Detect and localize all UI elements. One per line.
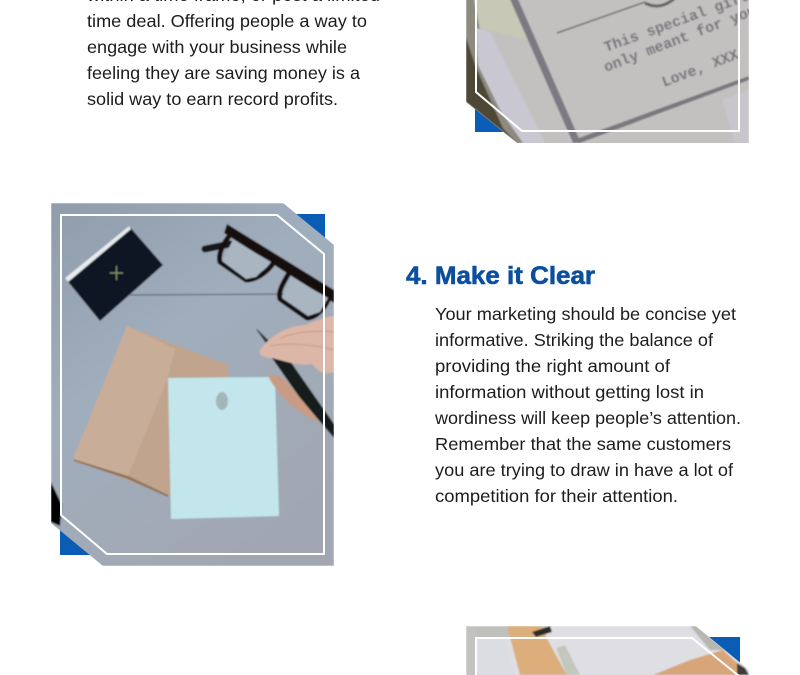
glasses bbox=[205, 244, 230, 249]
section 4 body text: competition for their attention. bbox=[435, 486, 678, 506]
fingers bbox=[260, 316, 334, 374]
section 4 body text: wordiness will keep people’s attention. bbox=[434, 408, 741, 428]
envelope bbox=[110, 328, 228, 496]
section 3 body text: solid way to earn record profits. bbox=[87, 89, 338, 109]
pen tip bbox=[256, 328, 269, 344]
photo: stationery on desk bbox=[51, 203, 334, 566]
photo: gift note: only meant for you bbox=[602, 3, 759, 77]
white frame bbox=[61, 215, 324, 554]
panel: section 3 photo bbox=[466, 0, 759, 150]
photo: person in white shirt bbox=[466, 626, 749, 675]
blue accent block bbox=[60, 214, 325, 555]
white frame bbox=[476, 0, 739, 131]
section 4 body text: Your marketing should be concise yet bbox=[435, 304, 736, 324]
section 3 body text: engage with your business while bbox=[87, 37, 347, 57]
section 3 body text bbox=[86, 0, 380, 109]
section 4 body text: information without getting lost in bbox=[435, 382, 704, 402]
section 4 body text: informative. Striking the balance of bbox=[435, 330, 713, 350]
white frame bbox=[476, 638, 739, 675]
panel: section 4 photo bbox=[51, 203, 334, 566]
pen body bbox=[272, 358, 334, 438]
section 4 heading: 4. Make it Clear bbox=[406, 262, 595, 290]
dark shadow bbox=[51, 482, 62, 526]
thumb bbox=[268, 375, 320, 422]
panel: section 5 photo bbox=[466, 626, 749, 675]
section 3 body text: time deal. Offering people a way to bbox=[87, 11, 367, 31]
blue accent block bbox=[475, 637, 740, 675]
blue accent block bbox=[475, 90, 535, 132]
notecard bbox=[168, 377, 279, 519]
notebook bbox=[65, 226, 163, 321]
section 4 body text: providing the right amount of bbox=[435, 356, 670, 376]
photo: gift note: Love, XXX bbox=[660, 47, 741, 92]
section 4 body text: Remember that the same customers bbox=[435, 434, 731, 454]
photo: gift note bbox=[466, 0, 759, 150]
section 4 body text: you are trying to draw in have a lot of bbox=[435, 460, 733, 480]
section 4 body text bbox=[434, 304, 741, 506]
section 3 body text: feeling they are saving money is a bbox=[87, 63, 360, 83]
